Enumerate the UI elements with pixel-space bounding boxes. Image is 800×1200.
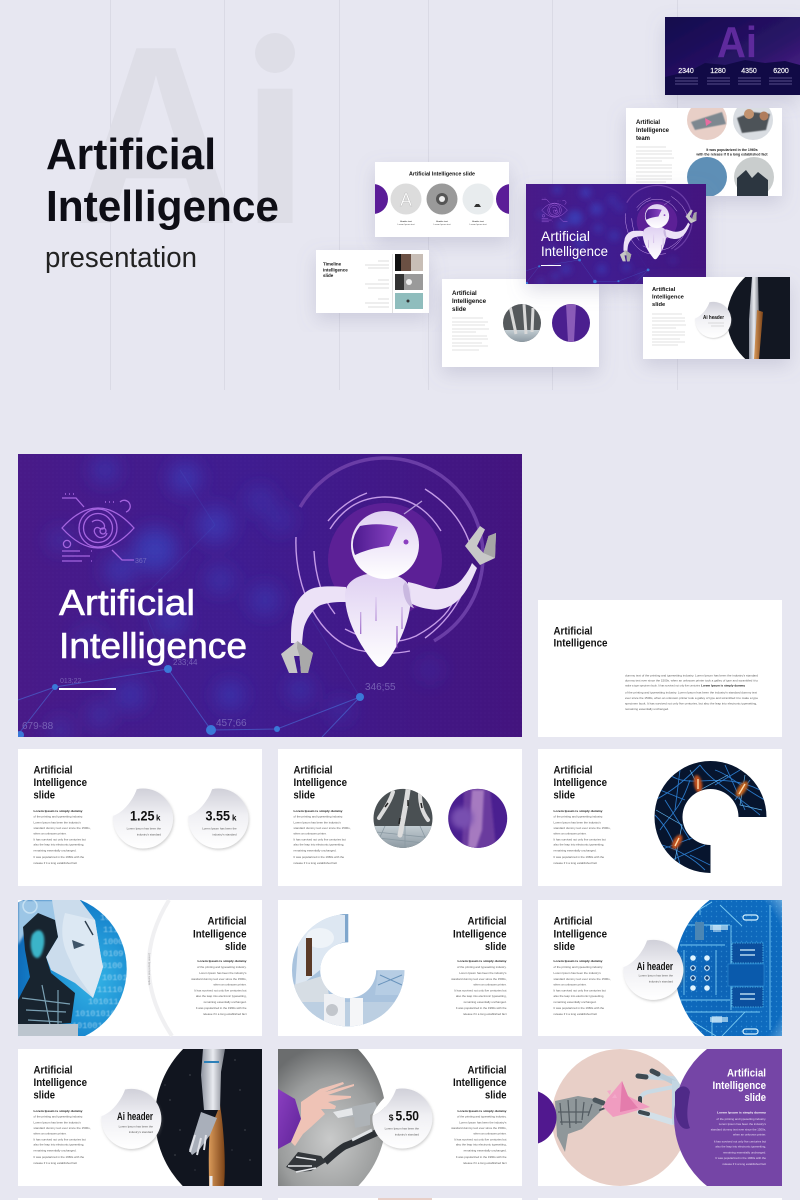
sticker: 3.55 k: [188, 789, 248, 849]
panel: price slide: It was popularized in the 1960s with the: [456, 1155, 507, 1159]
panel: robot and human arm slide: release if it a long established fact: [34, 1161, 77, 1165]
panel: robot face slide: It was popularized in the 1960s with the: [196, 1006, 247, 1010]
background network labels: 457;66: [216, 718, 247, 729]
heading: [59, 582, 247, 666]
mini slide: team: Intelligence: [636, 128, 670, 134]
panel: stats stickers slide: release if it a long established fact: [34, 861, 77, 865]
photo: robot hand on keyboard: [372, 788, 433, 848]
panel: neural ring slide: also the leap into electronic typesetting,: [554, 843, 604, 847]
sticker: Ai header: Lorem Ipsum has been the: [639, 974, 673, 978]
sticker: Ai header: [101, 1089, 161, 1149]
panel: photo circles slide: Artificial: [294, 765, 332, 777]
panel: robot and human arm slide: [18, 1045, 265, 1190]
panel: price slide: standard dummy text ever since the 1500s,: [451, 1126, 507, 1130]
photo: robot face with binary: 1111: [103, 925, 123, 935]
sticker: Ai header: industry's standard: [649, 980, 673, 984]
panel: stats stickers slide: when an unknown printer.: [34, 832, 67, 836]
panel: robotics ring slide: also the leap into electronic typesetting,: [456, 994, 507, 998]
panel: photo circles slide: release if it a long established fact: [294, 861, 337, 865]
mini slide: Ai header: slide: [652, 302, 666, 308]
mini slide: three circles: Header text: [436, 220, 448, 223]
sticker: 1.25 k: Lorem Ipsum has been the: [127, 826, 161, 830]
heading: Intelligence: [59, 625, 247, 666]
panel: price slide: Artificial: [468, 1065, 506, 1077]
panel: purple text slide: of the printing and typesetting industry.: [717, 1117, 766, 1121]
background network labels: 013;22: [60, 678, 82, 685]
mini slide: dark stats: 6200: [773, 68, 789, 75]
panel: robot face slide: Lorem Ipsum text sample: [148, 953, 152, 986]
sticker: 1.25 k: industry's standard: [137, 833, 161, 837]
panel: stats stickers slide: Artificial: [34, 765, 72, 777]
panel: robot face slide: also the leap into electronic typesetting,: [196, 994, 247, 998]
panel: robot face slide: Lorem Ipsum has been the industry's: [199, 971, 247, 975]
background network labels: [22, 558, 396, 732]
panel: purple text slide: remaining essentially unchanged.: [723, 1150, 766, 1154]
sticker: 1.25 k: [113, 789, 173, 849]
panel: stats stickers slide: Intelligence: [34, 777, 87, 789]
panel: price slide: Lorem Ipsum has been the industry's: [459, 1120, 507, 1124]
panel: robot face slide: when an unknown printer.: [214, 982, 247, 986]
panel: photo circles slide: Lorem Ipsum is simply dummy: [294, 809, 343, 813]
mini slide: team: Artificial: [636, 120, 660, 126]
panel: purple text slide: It has survived not only five centuries but: [714, 1139, 766, 1143]
sticker: $ 5.50: $: [389, 1113, 394, 1123]
photo: circuit board: [677, 900, 782, 1036]
ghost letters: Ai: i: [240, 0, 311, 277]
panel: robot face slide: Intelligence: [193, 928, 246, 940]
panel: robot face slide: Lorem Ipsum is simply dummy: [198, 959, 247, 963]
mini slide: Ai header: Intelligence: [652, 294, 685, 300]
photo: robot face with binary: 1000: [103, 937, 123, 947]
mini slide: team: [626, 100, 782, 197]
panel: circuit board slide: when an unknown printer.: [554, 982, 587, 986]
panel: robotics ring slide: Lorem Ipsum has been the industry's: [459, 971, 507, 975]
panel: neural ring slide: standard dummy text ever since the 1500s,: [554, 826, 611, 830]
panel: stats stickers slide: It was popularized in the 1960s with the: [34, 855, 85, 859]
panel: stats stickers slide: It has survived not only five centuries but: [34, 837, 86, 841]
mini slide: timeline: Timeline: [323, 262, 342, 266]
panel: purple text slide: also the leap into electronic typesetting,: [715, 1144, 766, 1148]
panel: photo circles slide: when an unknown printer.: [294, 832, 327, 836]
panel: price slide: also the leap into electronic typesetting,: [456, 1143, 507, 1147]
panel: robot face slide: It has survived not only five centuries but: [194, 988, 247, 992]
panel: neural ring slide: It has survived not only five centuries but: [554, 837, 606, 841]
panel: robotics ring slide: Lorem Ipsum is simply dummy: [458, 959, 507, 963]
mini slide: three circles: Header text: [400, 220, 412, 223]
panel: neural ring slide: when an unknown printer.: [554, 832, 587, 836]
panel: purple text slide: Intelligence: [712, 1080, 766, 1092]
mini slide: Ai header: Ai header: [703, 315, 724, 321]
panel: stats stickers slide: [18, 749, 262, 886]
panel: stats stickers slide: remaining essentially unchanged.: [34, 848, 77, 852]
panel: circuit board slide: Lorem Ipsum is simply dummy: [554, 959, 603, 963]
mini slide: Ai header: Artificial: [652, 287, 676, 293]
panel: stats stickers slide: of the printing and typesetting industry.: [34, 815, 83, 819]
title: Artificial: [46, 130, 216, 179]
photo: robot face with binary: 10101: [102, 973, 128, 983]
next row of slides, cut off at the page edge: [18, 1198, 782, 1200]
panel: neural ring slide: Artificial: [554, 765, 592, 777]
panel: photo circles slide: also the leap into electronic typesetting,: [294, 843, 344, 847]
mini slide: three circles: A: [400, 190, 412, 210]
panel: stats stickers slide: slide: [34, 789, 55, 801]
panel: circuit board slide: Artificial: [554, 916, 592, 928]
panel: robot and human arm slide: Lorem Ipsum is simply dummy: [34, 1109, 83, 1113]
panel: photo circles slide: [278, 749, 522, 886]
photo: robot face with binary: 1010010: [72, 1021, 108, 1031]
panel: price slide: remaining essentially unchanged.: [464, 1148, 507, 1152]
panel: neural ring slide: Intelligence: [554, 777, 607, 789]
panel: neural ring slide: remaining essentially unchanged.: [554, 848, 597, 852]
mini slide: purple cover: Artificial: [541, 228, 590, 244]
panel: price slide: [270, 1045, 522, 1190]
panel: neural ring slide: Lorem Ipsum has been the industry's: [554, 820, 601, 824]
panel: robot and human arm slide: Intelligence: [34, 1077, 87, 1089]
panel: stats stickers slide: also the leap into electronic typesetting,: [34, 843, 84, 847]
background network labels: 346;55: [365, 682, 396, 693]
panel: purple text slide: Lorem Ipsum has been the industry's: [719, 1122, 767, 1126]
panel: robot and human arm slide: standard dummy text ever since the 1500s,: [34, 1126, 91, 1130]
panel: robotics ring slide: It has survived not only five centuries but: [454, 988, 507, 992]
panel: price slide: of the printing and typesetting industry.: [457, 1115, 507, 1119]
panel: robot face slide: Artificial: [208, 916, 246, 928]
photo: robot face with binary: [18, 900, 127, 1036]
photo: purple figure: [448, 788, 508, 848]
panel: robot face slide: release if it a long established fact: [203, 1012, 247, 1016]
panel: price slide: It has survived not only five centuries but: [454, 1137, 507, 1141]
sticker: 3.55 k: k: [232, 814, 237, 823]
panel: robotics ring slide: slide: [485, 941, 506, 953]
panel: robotics ring slide: remaining essentially unchanged.: [464, 1000, 507, 1004]
sticker: $ 5.50: Lorem Ipsum has been the: [385, 1126, 419, 1130]
panel: circuit board slide: standard dummy text ever since the 1500s,: [554, 977, 611, 981]
panel: price slide: Intelligence: [453, 1077, 506, 1089]
panel: intro text slide: make a type specimen book. It has survived not only five centuries: [625, 684, 700, 688]
mini slide: Ai header: [639, 277, 794, 370]
panel: robotics ring slide: [278, 900, 522, 1036]
photo: neurons ring: [654, 761, 766, 873]
sticker: 3.55 k: industry's standard: [212, 833, 237, 837]
panel: intro text slide: dummy text ever since the 1500s, when an unknown printer took a galley of type and scrambled it to: [625, 679, 758, 683]
panel: price slide: when an unknown printer.: [474, 1132, 507, 1136]
mini slide: dark stats: 1280: [710, 68, 726, 75]
panel: robotics ring slide: release if it a long established fact: [463, 1012, 507, 1016]
panel: neural ring slide: of the printing and typesetting industry.: [554, 815, 603, 819]
background network labels: 367: [135, 558, 147, 565]
panel: robot face slide: slide: [225, 941, 246, 953]
mini slide: timeline: Intelligence: [323, 268, 348, 272]
panel: circuit board slide: It has survived not only five centuries but: [554, 988, 606, 992]
panel: robot and human arm slide: of the printing and typesetting industry.: [34, 1115, 83, 1119]
icon: robot: [251, 422, 519, 690]
sticker: $ 5.50: industry's standard: [395, 1133, 419, 1137]
mini slide: three circles: Lorem Ipsum text: [470, 223, 487, 226]
panel: intro text slide: Intelligence: [554, 638, 608, 650]
panel: intro text slide: dummy text of the printing and typesetting industry. Lorem Ipsum has been the industry's standard: [625, 674, 758, 678]
sticker: 1.25 k: 1.25: [130, 808, 155, 824]
photo: robot hands with origami: [555, 1071, 682, 1152]
panel: circuit board slide: [538, 900, 782, 1036]
mini slide: dark stats: [665, 17, 800, 95]
panel: neural ring slide: Lorem Ipsum is simply dummy: [554, 809, 603, 813]
panel: circuit board slide: Intelligence: [554, 928, 607, 940]
panel: intro text slide: ever since the 1500s, when an unknown printer took a galley of type and scrambled it to make a type: [625, 696, 758, 700]
panel: robot face slide: remaining essentially unchanged.: [204, 1000, 247, 1004]
icon: eye: [62, 494, 134, 561]
panel: purple text slide: Artificial: [727, 1068, 766, 1080]
mini slide: three circles: [358, 162, 526, 237]
panel: circuit board slide: Lorem Ipsum has been the industry's: [554, 971, 601, 975]
mini slide: two photo circles: Artificial: [452, 290, 477, 297]
photo: robot face with binary: 11110: [97, 985, 123, 995]
mini slide: three circles: Artificial Intelligence slide: [409, 172, 475, 178]
panel: circuit board slide: release if it a long established fact: [554, 1012, 597, 1016]
panel: circuit board slide: of the printing and typesetting industry.: [554, 965, 603, 969]
mini slide: three circles: Lorem Ipsum text: [398, 223, 415, 226]
sticker: 1.25 k: k: [156, 814, 161, 823]
sticker: $ 5.50: [372, 1089, 432, 1149]
panel: photo circles slide: It has survived not only five centuries but: [294, 837, 346, 841]
panel: stats stickers slide: Lorem Ipsum has been the industry's: [34, 820, 81, 824]
panel: robot and human arm slide: slide: [34, 1089, 55, 1101]
mini slide: dark stats: 4350: [741, 68, 757, 75]
panel: photo circles slide: of the printing and typesetting industry.: [294, 815, 343, 819]
photo: robotics ring: [292, 914, 404, 1026]
panel: robot and human arm slide: when an unknown printer.: [34, 1132, 67, 1136]
sticker: Ai header: Ai header: [117, 1111, 154, 1123]
sticker: $ 5.50: 5.50: [396, 1108, 419, 1124]
panel: circuit board slide: remaining essentially unchanged.: [554, 1000, 597, 1004]
panel: robot and human arm slide: Lorem Ipsum has been the industry's: [34, 1120, 81, 1124]
panel: robot and human arm slide: It was popularized in the 1960s with the: [34, 1155, 85, 1159]
panel: price slide: slide: [485, 1089, 506, 1101]
panel: circuit board slide: It was popularized in the 1960s with the: [554, 1006, 605, 1010]
panel: purple text slide: It was popularized in the 1960s with the: [715, 1156, 766, 1160]
panel: intro text slide: Artificial: [554, 625, 592, 637]
heading: Artificial: [59, 582, 195, 623]
title: [46, 130, 279, 231]
panel: robotics ring slide: Artificial: [468, 916, 506, 928]
mini slide: two photo circles: [442, 279, 599, 367]
sticker: Ai header: Ai header: [637, 961, 674, 973]
panel: neural ring slide: release if it a long established fact: [554, 861, 597, 865]
photo: human and robot hands: [278, 1049, 386, 1186]
panel: robotics ring slide: Intelligence: [453, 928, 506, 940]
mini slide: two photo circles: Intelligence: [452, 298, 487, 305]
panel: robot and human arm slide: also the leap into electronic typesetting,: [34, 1143, 84, 1147]
panel: intro text slide: remaining essentially unchanged.: [625, 707, 669, 711]
photo: robot face with binary: 101: [100, 913, 115, 923]
photo: robot face with binary: 101011: [88, 997, 119, 1007]
panel: photo circles slide: Intelligence: [294, 777, 347, 789]
sticker: 3.55 k: Lorem Ipsum has been the: [202, 826, 237, 830]
panel: circuit board slide: also the leap into electronic typesetting,: [554, 994, 604, 998]
mini slide: timeline: slide: [323, 273, 334, 278]
background network labels: 679-88: [22, 721, 54, 732]
panel: neural ring slide: slide: [554, 789, 575, 801]
mini slide: purple cover: [525, 173, 706, 286]
panel: neural ring slide: It was popularized in the 1960s with the: [554, 855, 605, 859]
panel: photo circles slide: Lorem Ipsum has been the industry's: [294, 820, 341, 824]
panel: photo circles slide: It was popularized in the 1960s with the: [294, 855, 345, 859]
mini slide: dark stats: 2340: [678, 68, 694, 75]
photo: dark arm circle: [156, 1049, 262, 1186]
panel: robotics ring slide: standard dummy text ever since the 1500s,: [451, 977, 507, 981]
mini slide: two photo circles: slide: [452, 306, 467, 313]
panel: purple text slide: Lorem Ipsum is simply dummy: [717, 1110, 766, 1114]
mini slide: three circles: Lorem Ipsum text: [434, 223, 451, 226]
panel: stats stickers slide: Lorem Ipsum is simply dummy: [34, 809, 83, 813]
mini slide: timeline: [316, 250, 429, 313]
panel: robotics ring slide: It was popularized in the 1960s with the: [456, 1006, 507, 1010]
title: Intelligence: [46, 182, 279, 231]
panel: intro text slide: of the printing and typesetting industry. Lorem Ipsum has been the industry's standard dummy text: [625, 690, 757, 694]
panel: intro text slide: Lorem Ipsum is simply dummy: [701, 684, 745, 688]
ghost letters: Ai: [79, 33, 295, 223]
panel: robot and human arm slide: It has survived not only five centuries but: [34, 1137, 86, 1141]
sticker: Ai header: [623, 940, 683, 1000]
panel: main cover slide: [16, 422, 522, 742]
panel: photo circles slide: standard dummy text ever since the 1500s,: [294, 826, 351, 830]
panel: purple text slide: slide: [744, 1092, 766, 1104]
mini slide: purple cover: Intelligence: [541, 243, 608, 259]
panel: photo circles slide: remaining essentially unchanged.: [294, 848, 337, 852]
panel: intro text slide: [538, 600, 782, 737]
panel: circuit board slide: slide: [554, 941, 575, 953]
panel: purple text slide: [538, 1049, 782, 1186]
panel: purple text slide: standard dummy text ever since the 1500s,: [711, 1128, 766, 1132]
panel: purple text slide: release if it a long established fact: [722, 1162, 766, 1166]
sticker: Ai header: industry's standard: [129, 1130, 153, 1134]
panel: robot face slide: standard dummy text ever since the 1500s,: [191, 977, 247, 981]
mini slide: dark stats: Ai: [717, 18, 757, 67]
mini slide: team: It was popularized in the 1960s: [706, 148, 758, 152]
panel: intro text slide: specimen book. It has survived not only five centuries, but also the leap into electronic typesetting,: [625, 701, 757, 705]
mini slide: three circles: Header text: [472, 220, 484, 223]
panel: robot and human arm slide: remaining essentially unchanged.: [34, 1148, 77, 1152]
panel: price slide: Lorem Ipsum is simply dummy: [458, 1109, 507, 1113]
panel: purple text slide: when an unknown printer.: [733, 1133, 766, 1137]
background network labels: 233;44: [173, 658, 198, 667]
panel: stats stickers slide: standard dummy text ever since the 1500s,: [34, 826, 91, 830]
panel: photo circles slide: slide: [294, 789, 315, 801]
panel: robot face slide: [18, 900, 262, 1036]
mini slide: team: with the release if it a long established fact: [695, 152, 768, 156]
panel: robot face slide: of the printing and typesetting industry.: [197, 965, 247, 969]
panel: price slide: release if it a long established fact: [463, 1161, 507, 1165]
ghost letters: Ai: A: [73, 0, 239, 277]
photo: robot face with binary: 10101010: [75, 1009, 116, 1019]
panel: robotics ring slide: of the printing and typesetting industry.: [457, 965, 507, 969]
panel: robotics ring slide: when an unknown printer.: [474, 982, 507, 986]
sticker: 3.55 k: 3.55: [206, 808, 230, 824]
photo: robot face with binary: 0109: [103, 949, 123, 959]
panel: robot and human arm slide: Artificial: [34, 1065, 72, 1077]
sticker: Ai header: Lorem Ipsum has been the: [119, 1124, 153, 1128]
photo: robot face with binary: 0100: [102, 961, 122, 971]
subtitle: presentation: [45, 242, 197, 274]
panel: neural ring slide: [538, 749, 782, 886]
mini slide: team: team: [636, 136, 650, 142]
